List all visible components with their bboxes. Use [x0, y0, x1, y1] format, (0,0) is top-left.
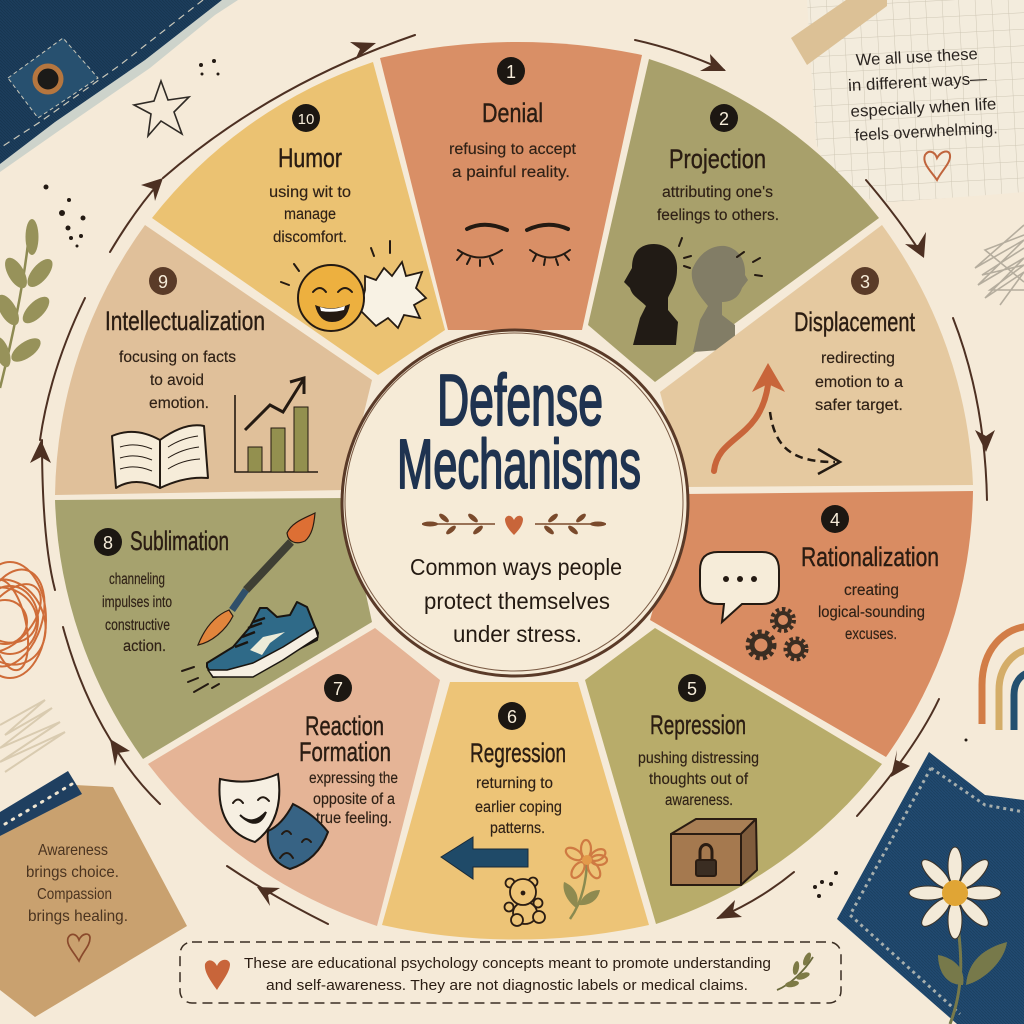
description: [102, 571, 172, 655]
heading: Regression: [470, 738, 566, 768]
icon: open book: [112, 425, 208, 488]
wedge: [585, 628, 882, 924]
title: Defense: [437, 361, 603, 441]
center circle: [342, 330, 688, 676]
wedge: [660, 225, 973, 487]
icon: running shoe: [182, 602, 318, 692]
icon: laughing face: [281, 241, 390, 331]
description: emotion to a: [815, 374, 903, 391]
note text: feels overwhelming.: [854, 119, 998, 145]
description: [638, 750, 759, 809]
icon: flower: [564, 840, 607, 919]
heading: Denial: [482, 98, 543, 128]
number: 10: [298, 111, 314, 128]
heading: Reaction: [305, 711, 384, 741]
note text: especially when life: [850, 95, 997, 121]
description: thoughts out of: [649, 771, 749, 788]
decoration: orange scribble: [0, 561, 59, 678]
description: [818, 582, 925, 643]
icon: heart: [205, 960, 230, 990]
icon: speech bubble: [700, 552, 779, 622]
kraft text: Compassion: [37, 886, 112, 903]
number: [94, 528, 122, 556]
description: pushing distressing: [638, 750, 759, 767]
description: creating: [844, 582, 899, 599]
description: returning to: [476, 775, 553, 792]
description: [475, 775, 562, 837]
description: [449, 141, 577, 181]
heading: Intellectualization: [105, 306, 265, 336]
tape: [791, 0, 887, 65]
icon: bar chart: [235, 378, 318, 472]
description: patterns.: [490, 820, 545, 837]
description: [309, 770, 398, 827]
decoration: dots: [44, 59, 968, 898]
description: [269, 184, 351, 246]
heading: Projection: [669, 144, 766, 174]
icon: gears: [748, 609, 806, 660]
title: Mechanisms: [397, 425, 641, 503]
denim flower patch: [837, 752, 1024, 1024]
number: [324, 674, 352, 702]
description: emotion.: [149, 395, 209, 412]
description: redirecting: [821, 350, 895, 367]
disclaimer text: [244, 955, 771, 994]
description: safer target.: [815, 397, 903, 414]
description: [815, 350, 903, 414]
icon: two silhouettes: [624, 238, 762, 352]
denim corner top left: [0, 0, 238, 172]
description: constructive: [105, 617, 170, 634]
icon: redirect arrows: [714, 363, 840, 474]
note text: in different ways—: [848, 70, 988, 95]
number: 2: [719, 109, 729, 129]
kraft text: brings choice.: [26, 864, 119, 881]
description: opposite of a: [313, 791, 395, 808]
icon: closed eyes: [457, 225, 570, 266]
disclaimer text: and self-awareness. They are not diagnostic labels or medical claims.: [266, 977, 748, 994]
subtitle: under stress.: [453, 621, 582, 647]
wedge: [148, 628, 440, 926]
decoration: star: [134, 81, 189, 136]
number: 9: [158, 272, 168, 292]
number: 6: [507, 707, 517, 727]
number: [710, 104, 738, 132]
description: manage: [284, 206, 336, 223]
kraft text: brings healing.: [28, 908, 128, 925]
number: [292, 104, 320, 132]
number: 1: [506, 62, 516, 82]
decoration: beige scribble: [0, 700, 65, 772]
description: logical-sounding: [818, 604, 925, 621]
panel: 9 Intellectualization: [55, 225, 372, 495]
description: feelings to others.: [657, 207, 779, 224]
heading: [299, 711, 391, 767]
number: [497, 57, 525, 85]
number: [821, 505, 849, 533]
number: [498, 702, 526, 730]
description: earlier coping: [475, 799, 562, 816]
decoration: grey scribble: [975, 225, 1024, 305]
heading: Formation: [299, 737, 391, 767]
icon: burst: [360, 262, 426, 328]
kraft text: Awareness: [38, 842, 108, 859]
heading: Humor: [278, 143, 342, 173]
disclaimer text: These are educational psychology concepts meant to promote understanding: [244, 955, 771, 972]
kraft text: [26, 842, 128, 925]
description: a painful reality.: [452, 164, 570, 181]
description: focusing on facts: [119, 349, 236, 366]
description: awareness.: [665, 792, 733, 809]
subtitle: protect themselves: [424, 588, 610, 614]
panel: 10 Humor: [152, 62, 445, 375]
number: 3: [860, 272, 870, 292]
panel: 6 Regression: [382, 682, 649, 940]
panel: 4 Rationalization: [650, 491, 973, 757]
wedge: [55, 225, 372, 495]
description: discomfort.: [273, 229, 347, 246]
description: impulses into: [102, 594, 172, 611]
description: action.: [123, 638, 166, 655]
heart: [924, 151, 950, 180]
description: refusing to accept: [449, 141, 577, 158]
icon: teddy bear: [504, 878, 545, 926]
subtitle: Common ways people: [410, 554, 622, 580]
description: expressing the: [309, 770, 398, 787]
heading: Sublimation: [130, 526, 229, 556]
heart: [68, 934, 90, 961]
description: true feeling.: [316, 810, 392, 827]
panel: 5 Repression: [585, 628, 882, 924]
note text: We all use these: [855, 45, 978, 70]
heading: Repression: [650, 710, 746, 740]
heading: Rationalization: [801, 542, 939, 572]
icon: locked box: [671, 819, 757, 885]
description: to avoid: [150, 372, 204, 389]
number: 4: [830, 510, 840, 530]
number: [678, 674, 706, 702]
number: [851, 267, 879, 295]
icon: sprig: [777, 951, 813, 990]
description: excuses.: [845, 626, 897, 643]
wedge: [650, 491, 973, 757]
kraft paper note: [0, 771, 187, 1017]
wedge: [382, 682, 649, 940]
icon: paintbrush: [198, 513, 315, 645]
wedge: [588, 59, 879, 382]
number: 7: [333, 679, 343, 699]
title: [397, 361, 641, 503]
wedge: [380, 42, 642, 330]
description: [119, 349, 236, 412]
description: [657, 184, 779, 224]
decoration: leaf sprig: [0, 219, 57, 388]
icon: left arrow: [441, 837, 528, 879]
wedge: [152, 62, 445, 375]
number: 5: [687, 679, 697, 699]
icon: theatre masks: [219, 774, 328, 869]
number: [149, 267, 177, 295]
grid paper note: [791, 0, 1024, 202]
subtitle: [410, 554, 622, 647]
panel: 1 Denial: [380, 42, 642, 330]
note text: [846, 44, 998, 145]
heading: Displacement: [794, 307, 915, 337]
flower: [909, 847, 1007, 1024]
description: using wit to: [269, 184, 351, 201]
disclaimer box: [180, 942, 841, 1003]
description: attributing one's: [662, 184, 773, 201]
panel: 3 Displacement: [660, 225, 973, 487]
wedge: [55, 498, 372, 759]
number: 8: [103, 533, 113, 553]
description: channeling: [109, 571, 165, 588]
panel: 8 Sublimation: [55, 498, 372, 759]
panel: 2 Projection: [588, 59, 879, 382]
decoration: rainbow: [982, 626, 1024, 730]
panel: 7 Reaction Formation: [148, 628, 440, 926]
washi tape: [0, 771, 82, 836]
divider with heart: [422, 512, 606, 536]
